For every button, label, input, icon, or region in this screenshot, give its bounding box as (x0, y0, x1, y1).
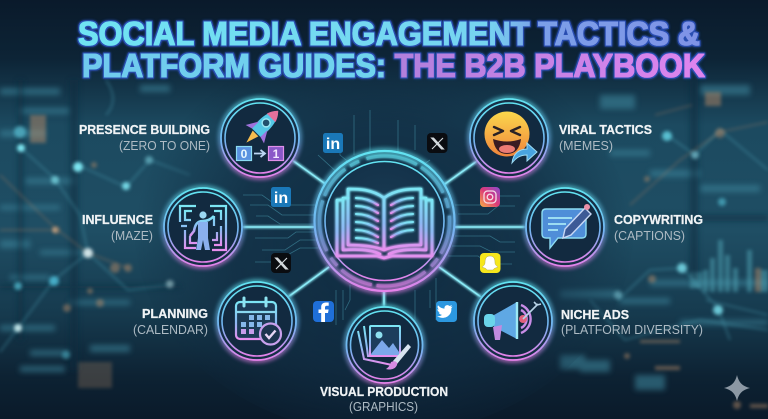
label: visual production (320, 384, 448, 414)
label: niche ads: (PLATFORM DIVERSITY) (561, 322, 703, 337)
label: planning: (CALENDAR) (133, 322, 208, 337)
label: niche ads (561, 307, 703, 337)
circuit traces (243, 110, 520, 335)
panel: influence (164, 188, 242, 266)
icon: linkedin lower (271, 187, 291, 207)
label: visual production: (GRAPHICS) (349, 399, 418, 414)
center hub: open book (314, 151, 454, 291)
icon: linkedin upper: in (326, 136, 340, 153)
label: viral tactics: VIRAL TACTICS (559, 122, 652, 137)
icon: rocket and zero to one: 0 (241, 147, 248, 161)
icon: x upper (427, 133, 448, 153)
panel: viral tactics (470, 99, 548, 177)
panel: visual production (346, 307, 422, 383)
label: niche ads: NICHE ADS (561, 307, 629, 322)
label: presence building (79, 122, 210, 153)
label: influence (82, 212, 153, 243)
label: visual production: VISUAL PRODUCTION (320, 384, 448, 399)
title: SOCIAL MEDIA ENGAGEMENT TACTICS & (78, 16, 700, 53)
icon: megaphone and target (484, 302, 541, 340)
icon: twitter bird (436, 301, 457, 322)
icon: calendar with check (236, 298, 281, 344)
icon: linkedin lower: in (274, 190, 288, 207)
icon: snapchat (480, 253, 500, 273)
connector lines (242, 160, 526, 308)
panel: planning (218, 282, 296, 360)
icon: instagram (480, 187, 500, 207)
icon: x lower (271, 253, 291, 273)
icon: photos and paint brush (358, 326, 411, 370)
icon: linkedin upper (323, 133, 343, 153)
label: copywriting: (CAPTIONS) (614, 228, 685, 243)
icon: facebook (313, 301, 334, 322)
label: copywriting: COPYWRITING (614, 212, 703, 227)
label: viral tactics (559, 122, 652, 153)
icon: rocket and zero to one: 1 (273, 147, 280, 161)
label: planning: PLANNING (142, 306, 208, 321)
title (78, 16, 705, 85)
panel: niche ads (474, 282, 552, 360)
panel: copywriting (526, 188, 604, 266)
label: influence: (MAZE) (111, 228, 153, 243)
panel: presence building (221, 99, 299, 177)
label: influence: INFLUENCE (82, 212, 153, 227)
label: presence building: PRESENCE BUILDING (79, 122, 210, 137)
icon: maze with figure (180, 206, 226, 250)
icon: speech bubble and pencil (542, 204, 591, 248)
label: viral tactics: (MEMES) (559, 138, 613, 153)
title: PLATFORM GUIDES: THE B2B PLAYBOOK (82, 48, 705, 85)
label: planning (133, 306, 208, 337)
icon: rocket and zero to one (236, 102, 287, 161)
label: presence building: (ZERO TO ONE) (119, 138, 210, 153)
icon: sparkle watermark (724, 375, 750, 401)
label: copywriting (614, 212, 703, 243)
icon: laughing emoji with share arrow (484, 112, 537, 163)
icon: open book (337, 189, 432, 258)
